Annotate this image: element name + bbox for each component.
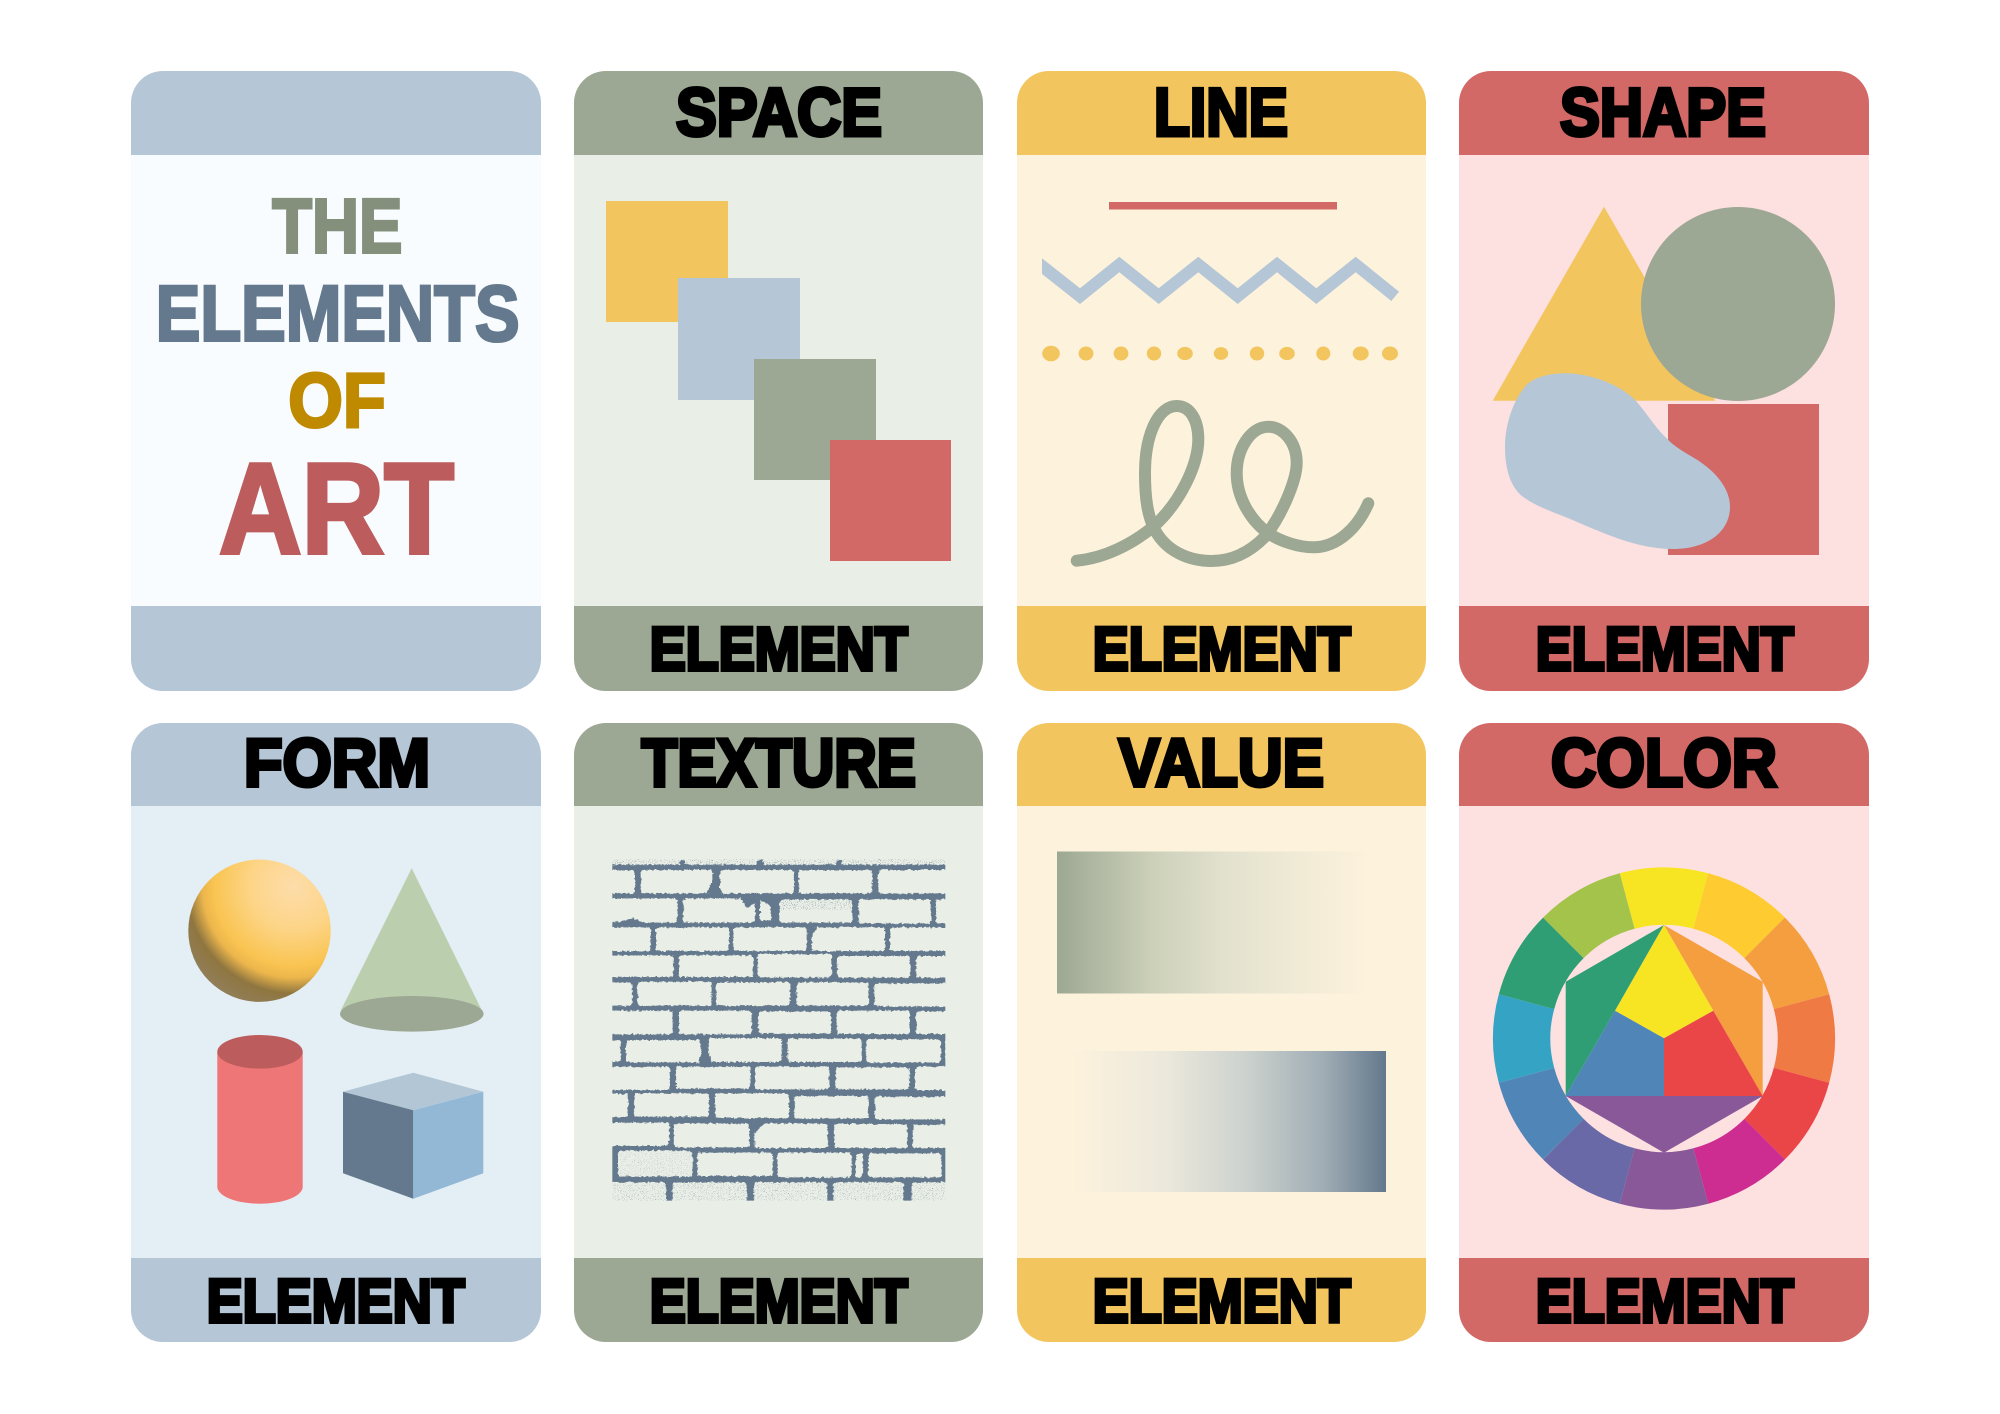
zigzag line (1042, 257, 1399, 304)
icon: cube (343, 1073, 483, 1199)
title: the elements of art: ART (219, 437, 454, 581)
dotted line (1042, 346, 1398, 361)
footer label: element: ELEMENT (650, 1267, 908, 1336)
footer label: element: ELEMENT (1093, 615, 1351, 684)
title: the elements of art (156, 184, 520, 581)
heading: space: SPACE (676, 76, 882, 150)
gradient: green to cream (1057, 852, 1367, 994)
panel: line card (1017, 71, 1426, 691)
shapes illustration (1493, 207, 1835, 555)
panel: shape card (1459, 71, 1869, 691)
straight line (1109, 202, 1337, 210)
icon: cone (340, 868, 484, 1032)
gradient: cream to slate blue (1072, 1051, 1386, 1192)
panel: title card (131, 71, 541, 691)
icon: cylinder (217, 1035, 303, 1204)
heading: form: FORM (244, 726, 430, 801)
panel: color card (1459, 723, 1869, 1342)
brick wall texture (612, 859, 946, 1201)
panel: texture card (574, 723, 983, 1342)
title: the elements of art: THE (272, 184, 402, 270)
panel: space card (574, 71, 983, 691)
heading: shape: SHAPE (1560, 76, 1766, 150)
color wheel center hexagon (1566, 925, 1763, 1153)
footer label: element: ELEMENT (650, 615, 908, 684)
heading: line: LINE (1154, 76, 1288, 150)
footer label: element: ELEMENT (1536, 1267, 1794, 1336)
heading: color: COLOR (1551, 726, 1777, 801)
color wheel ring (1493, 867, 1835, 1210)
icon: sphere (188, 860, 331, 1002)
overlapping squares illustration (606, 201, 951, 561)
footer label: element: ELEMENT (207, 1267, 465, 1336)
title: the elements of art: ELEMENTS (156, 270, 520, 358)
footer label: element: ELEMENT (1093, 1267, 1351, 1336)
curly line (1077, 406, 1368, 561)
heading: texture: TEXTURE (642, 726, 916, 801)
heading: value: VALUE (1118, 726, 1324, 801)
footer label: element: ELEMENT (1536, 615, 1794, 684)
panel: form card (131, 723, 541, 1342)
panel: value card (1017, 723, 1426, 1342)
title: the elements of art: OF (288, 358, 386, 444)
